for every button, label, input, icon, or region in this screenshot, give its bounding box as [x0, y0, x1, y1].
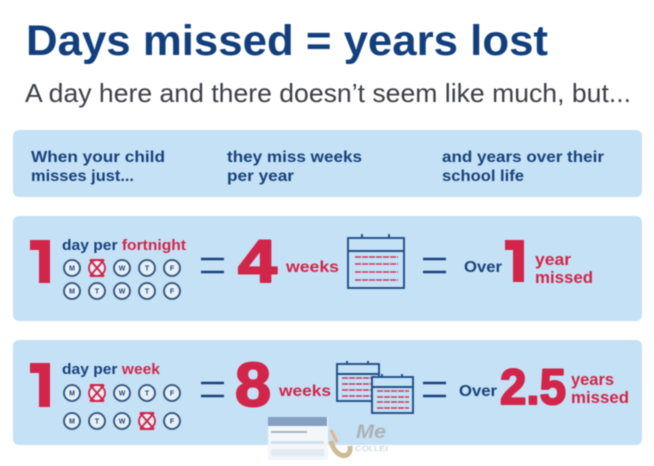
- big number 1: [30, 363, 50, 407]
- panel: one day per fortnight: [13, 216, 642, 321]
- weekday circles: week: T: [145, 390, 150, 398]
- watermark: logo: Me: [356, 422, 386, 443]
- big number 2.5: 2.5: [500, 359, 566, 415]
- big number 4: 4: [238, 228, 278, 295]
- weekday circles: week: M: [69, 418, 75, 426]
- label: weeks: weeks: [278, 383, 331, 400]
- label: over: Over: [459, 383, 497, 400]
- heading: they miss weeks: they miss weeks: [227, 149, 362, 166]
- watermark: thumbnail: [268, 417, 328, 460]
- label: years missed: missed: [571, 389, 629, 407]
- big number 1: [30, 240, 50, 283]
- weekday circles: fortnight: T: [145, 288, 150, 296]
- heading: when your child misses: misses just...: [31, 168, 134, 185]
- weekday circles: fortnight: M: [69, 266, 75, 272]
- weekday circles: fortnight: W: [119, 288, 126, 296]
- watermark: logo: [331, 422, 388, 456]
- watermark: logo: COLLEI: [355, 444, 388, 453]
- label: year missed: year: [535, 251, 572, 269]
- weekday circles: fortnight: W: [119, 266, 126, 272]
- heading: they miss weeks: per year: [227, 168, 294, 185]
- equals sign: [201, 383, 224, 396]
- label: day per fortnight: day per fortnight: [62, 238, 186, 254]
- weekday circles: week: [64, 385, 180, 429]
- weekday circles: fortnight: T: [145, 266, 150, 272]
- label: year missed: missed: [535, 269, 593, 287]
- panel: column headings: [13, 130, 642, 197]
- equals sign: [423, 259, 446, 272]
- label: over: Over: [464, 259, 502, 276]
- weekday circles: week: M: [69, 390, 75, 398]
- icon: two calendars: [337, 361, 413, 413]
- subtitle: A day here and there doesn’t seem like much, but...: [25, 78, 631, 108]
- heading: and years: and years over their: [442, 149, 604, 166]
- weekday circles: week: T: [95, 418, 100, 426]
- weekday circles: fortnight: T: [95, 288, 100, 296]
- equals sign: [201, 259, 224, 272]
- weekday circles: week: W: [119, 390, 126, 398]
- label: weeks: weeks: [285, 259, 339, 276]
- weekday circles: week: F: [170, 418, 175, 426]
- big number 8: 8: [235, 351, 271, 420]
- heading: and years: school life: [442, 168, 524, 185]
- weekday circles: fortnight: F: [170, 266, 175, 272]
- equals sign: [423, 383, 446, 396]
- label: day per week: day per week: [62, 362, 161, 378]
- weekday circles: fortnight: M: [69, 288, 75, 296]
- weekday circles: fortnight: F: [170, 288, 175, 296]
- icon: calendar: [348, 234, 404, 288]
- weekday circles: week: W: [119, 418, 126, 426]
- weekday circles: fortnight: [64, 260, 180, 299]
- weekday circles: week: F: [170, 390, 175, 398]
- title: Days missed = years lost: [26, 17, 548, 65]
- label: years missed: years: [571, 371, 614, 389]
- panel: one day per week: [13, 340, 642, 445]
- big number 1: [505, 240, 524, 282]
- heading: when your child misses: When your child: [31, 149, 165, 166]
